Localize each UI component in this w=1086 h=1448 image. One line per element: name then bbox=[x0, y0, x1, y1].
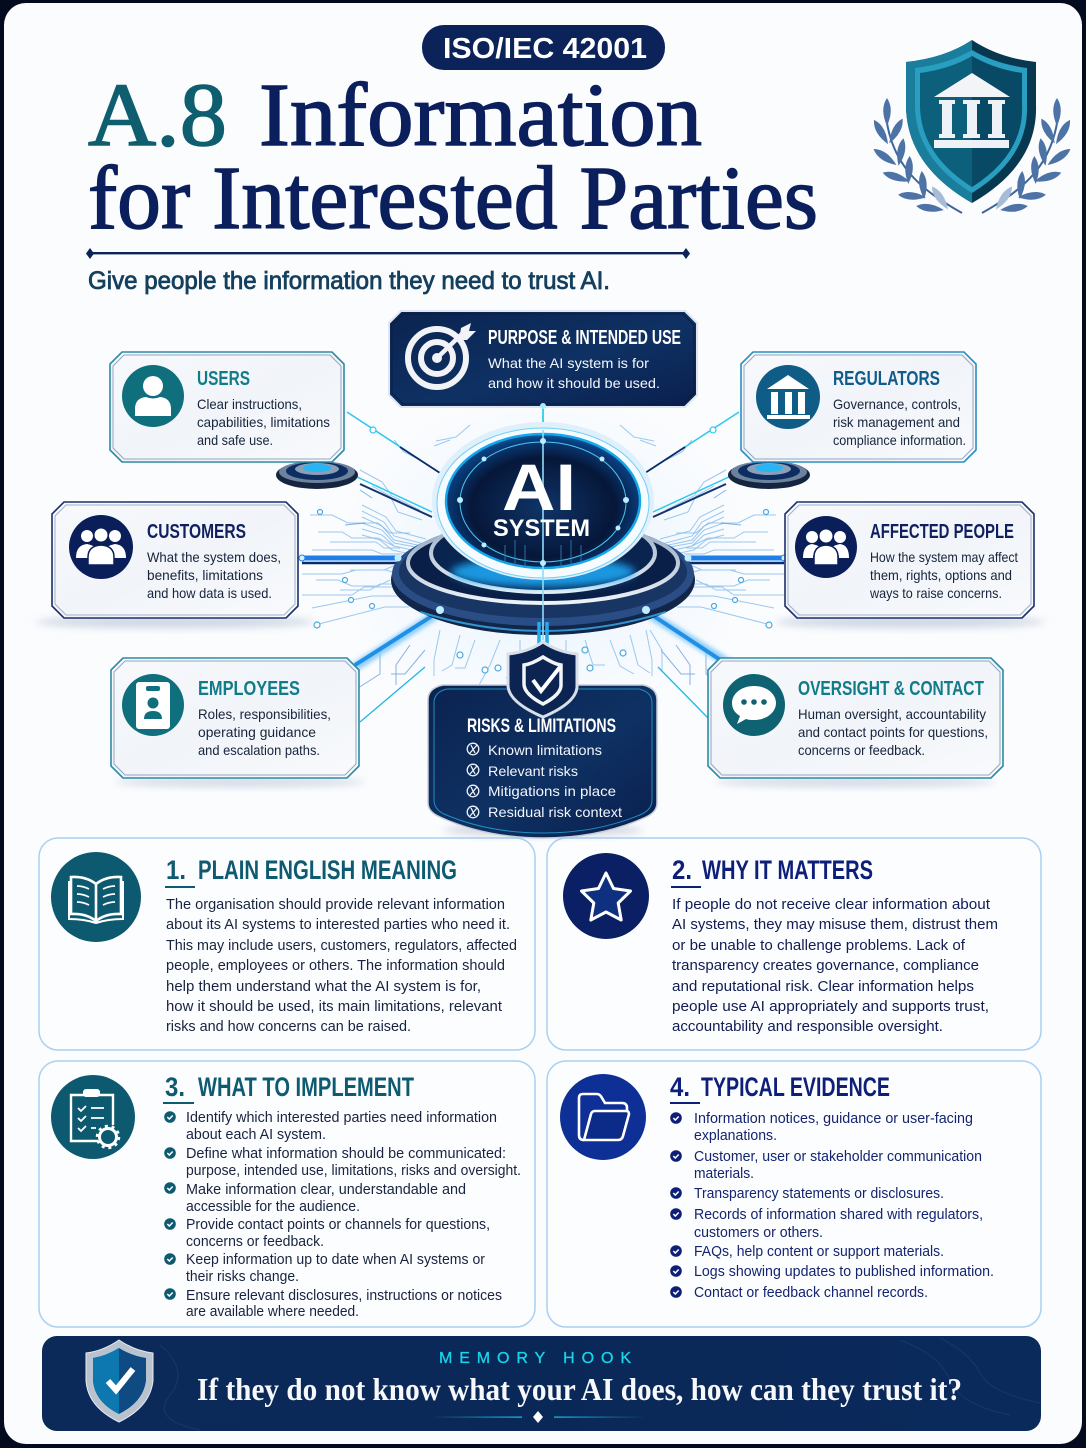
description: compliance information. bbox=[833, 432, 966, 448]
heading: CUSTOMERS bbox=[147, 521, 246, 543]
hub label bbox=[493, 450, 590, 542]
panel: affected people bbox=[775, 502, 1045, 628]
checklist: customers or others. bbox=[694, 1225, 823, 1241]
circuit traces bbox=[302, 425, 784, 688]
checklist: their risks change. bbox=[186, 1269, 299, 1285]
heading: 4. bbox=[670, 1072, 690, 1102]
body text bbox=[166, 896, 517, 1035]
panel: risks & limitations bbox=[428, 642, 657, 838]
description: What the system does, bbox=[147, 549, 281, 565]
label: MEMORY HOOK bbox=[439, 1350, 631, 1367]
panel: customers bbox=[35, 502, 315, 628]
description bbox=[147, 549, 281, 601]
heading: PLAIN ENGLISH MEANING bbox=[198, 855, 457, 885]
checklist: Identify which interested parties need information bbox=[186, 1110, 497, 1126]
icon: id badge bbox=[122, 674, 184, 736]
body text: people use AI appropriately and supports trust, bbox=[672, 998, 989, 1015]
icon: open book bbox=[51, 852, 141, 942]
body text bbox=[672, 896, 998, 1035]
panel: typical evidence bbox=[547, 1061, 1041, 1327]
body text: This may include users, customers, regulators, affected bbox=[166, 937, 517, 954]
icon: shield with check bbox=[508, 642, 577, 717]
list bbox=[467, 742, 622, 820]
heading: RISKS & LIMITATIONS bbox=[467, 716, 616, 737]
description: and how it should be used. bbox=[488, 375, 660, 391]
body text: transparency creates governance, compliance bbox=[672, 957, 979, 974]
heading: 3. bbox=[165, 1072, 185, 1102]
diagram background glow bbox=[273, 350, 813, 770]
title: A.8 bbox=[88, 66, 227, 165]
heading: WHAT TO IMPLEMENT bbox=[198, 1072, 414, 1102]
glowing lens bbox=[432, 422, 654, 640]
memory hook banner bbox=[42, 1336, 1041, 1431]
checklist: Ensure relevant disclosures, instructions or notices bbox=[186, 1288, 502, 1304]
description: benefits, limitations bbox=[147, 567, 263, 583]
ornament bbox=[430, 1411, 646, 1423]
hub label: SYSTEM bbox=[493, 515, 590, 542]
description: How the system may affect bbox=[870, 549, 1018, 565]
checklist: Contact or feedback channel records. bbox=[694, 1285, 928, 1301]
icon: clipboard with gear bbox=[51, 1075, 135, 1159]
body text: how it should be used, its main limitations, relevant bbox=[166, 998, 503, 1015]
checklist: materials. bbox=[694, 1166, 754, 1182]
body text: or be unable to challenge problems. Lack of bbox=[672, 937, 966, 954]
checklist: Provide contact points or channels for questions, bbox=[186, 1217, 490, 1233]
description: risk management and bbox=[833, 414, 960, 430]
checklist: about each AI system. bbox=[186, 1127, 326, 1143]
description: capabilities, limitations bbox=[197, 414, 330, 430]
heading bbox=[163, 1072, 414, 1104]
heading: 2. bbox=[672, 855, 692, 885]
icon: speech bubble bbox=[723, 674, 785, 736]
description: and escalation paths. bbox=[198, 742, 320, 758]
panel: purpose & intended use bbox=[389, 311, 697, 409]
heading: OVERSIGHT & CONTACT bbox=[798, 678, 984, 700]
hub label: AI bbox=[502, 450, 576, 524]
heading bbox=[670, 1072, 890, 1104]
connector to risks bbox=[539, 622, 547, 650]
description bbox=[798, 706, 988, 758]
description bbox=[197, 396, 330, 448]
description bbox=[198, 706, 331, 758]
panel: plain english meaning bbox=[39, 838, 535, 1050]
icon: star bbox=[563, 853, 649, 939]
connectors from AI system to cards bbox=[299, 406, 787, 722]
body text: risks and how concerns can be raised. bbox=[166, 1018, 411, 1035]
panel: what to implement bbox=[39, 1061, 535, 1327]
icon: shield with check bbox=[86, 1340, 153, 1422]
checklist: concerns or feedback. bbox=[186, 1234, 324, 1250]
list: Residual risk context bbox=[488, 804, 622, 820]
heading: 1. bbox=[166, 855, 186, 885]
icon: folder bbox=[560, 1074, 646, 1160]
description: concerns or feedback. bbox=[798, 742, 925, 758]
checklist: Make information clear, understandable and bbox=[186, 1182, 466, 1198]
description bbox=[488, 355, 660, 391]
icon: people bbox=[69, 515, 133, 579]
heading: EMPLOYEES bbox=[198, 678, 300, 700]
title: Information bbox=[259, 66, 702, 165]
checklist: Logs showing updates to published information. bbox=[694, 1264, 994, 1280]
heading: AFFECTED PEOPLE bbox=[870, 521, 1014, 543]
body text: If people do not receive clear information about bbox=[672, 896, 991, 913]
pedestal left bbox=[276, 461, 358, 489]
description: What the AI system is for bbox=[488, 355, 649, 371]
checklist: purpose, intended use, limitations, risks and oversight. bbox=[186, 1163, 521, 1179]
panel: regulators bbox=[741, 352, 976, 462]
central AI system hub bbox=[391, 422, 695, 640]
checklist bbox=[164, 1110, 521, 1320]
description: and contact points for questions, bbox=[798, 724, 988, 740]
badge: ISO/IEC 42001: ISO/IEC 42001 bbox=[443, 33, 647, 65]
body text: AI systems, they may misuse them, distrust them bbox=[672, 916, 998, 933]
subtitle: Give people the information they need to trust AI. bbox=[88, 267, 610, 295]
checklist: Transparency statements or disclosures. bbox=[694, 1186, 944, 1202]
panel: oversight & contact bbox=[708, 658, 1003, 787]
heading: WHY IT MATTERS bbox=[702, 855, 873, 885]
quote: If they do not know what your AI does, how can they trust it? bbox=[197, 1371, 962, 1407]
heading: PURPOSE & INTENDED USE bbox=[488, 327, 681, 349]
body text: accountability and responsible oversight. bbox=[672, 1018, 943, 1035]
title bbox=[88, 66, 818, 248]
description: and safe use. bbox=[197, 432, 273, 448]
panel: users bbox=[110, 352, 344, 462]
title rule bbox=[86, 248, 690, 259]
list: Known limitations bbox=[488, 742, 602, 758]
checklist: accessible for the audience. bbox=[186, 1199, 360, 1215]
body text: about its AI systems to interested parties who need it. bbox=[166, 916, 510, 933]
body text: and reputational risk. Clear information helps bbox=[672, 978, 974, 995]
icon: people bbox=[795, 516, 857, 578]
title: for Interested Parties bbox=[88, 149, 818, 248]
checklist: Keep information up to date when AI systems or bbox=[186, 1252, 485, 1268]
emblem: shield with institution and laurels bbox=[871, 40, 1073, 214]
panel: employees bbox=[111, 658, 365, 787]
checklist bbox=[670, 1111, 994, 1301]
pedestal right bbox=[728, 461, 810, 489]
checklist: explanations. bbox=[694, 1128, 777, 1144]
heading bbox=[165, 855, 457, 888]
icon: target bbox=[408, 323, 476, 387]
icon: institution bbox=[756, 365, 820, 429]
description: ways to raise concerns. bbox=[869, 585, 1002, 601]
list: Mitigations in place bbox=[488, 783, 616, 799]
description: Roles, responsibilities, bbox=[198, 706, 331, 722]
description bbox=[833, 396, 966, 448]
description: Human oversight, accountability bbox=[798, 706, 986, 722]
description: them, rights, options and bbox=[870, 567, 1012, 583]
description bbox=[869, 549, 1018, 601]
description: Governance, controls, bbox=[833, 396, 961, 412]
checklist: Define what information should be communicated: bbox=[186, 1146, 506, 1162]
icon: user bbox=[122, 365, 184, 427]
checklist: are available where needed. bbox=[186, 1304, 359, 1320]
checklist: FAQs, help content or support materials. bbox=[694, 1244, 944, 1260]
heading: TYPICAL EVIDENCE bbox=[701, 1072, 890, 1102]
body text: help them understand what the AI system is for, bbox=[166, 978, 481, 995]
heading: USERS bbox=[197, 368, 250, 390]
checklist: Records of information shared with regulators, bbox=[694, 1207, 983, 1223]
list: Relevant risks bbox=[488, 763, 578, 779]
panel: why it matters bbox=[547, 838, 1041, 1050]
description: Clear instructions, bbox=[197, 396, 302, 412]
checklist: Information notices, guidance or user-facing bbox=[694, 1111, 973, 1127]
body text: The organisation should provide relevant information bbox=[166, 896, 505, 913]
description: operating guidance bbox=[198, 724, 316, 740]
description: and how data is used. bbox=[147, 585, 272, 601]
checklist: Customer, user or stakeholder communication bbox=[694, 1149, 982, 1165]
badge: ISO/IEC 42001 bbox=[422, 25, 665, 70]
platform rings bbox=[391, 514, 695, 635]
heading: REGULATORS bbox=[833, 368, 940, 390]
heading bbox=[671, 855, 873, 888]
body text: people, employees or others. The information should bbox=[166, 957, 505, 974]
